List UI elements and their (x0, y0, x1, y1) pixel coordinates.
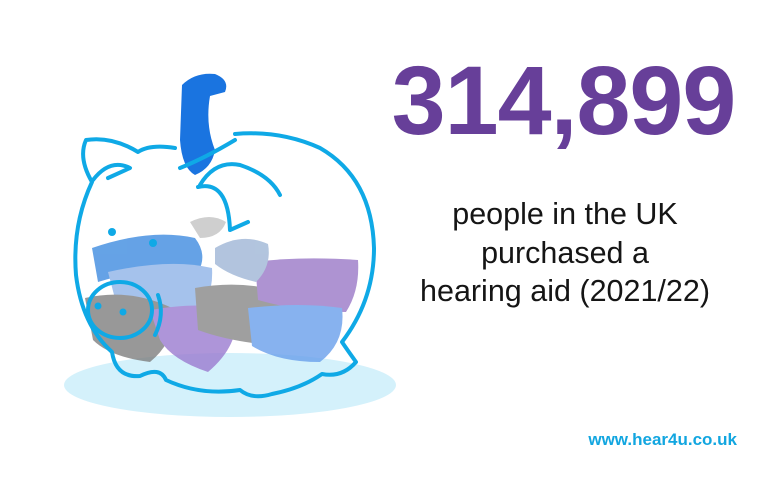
eyes and nostrils (94, 228, 157, 316)
headline number: 314,899 (392, 46, 735, 155)
hearing aid on top (180, 74, 226, 175)
pig outline (75, 133, 374, 396)
shadow ellipse (64, 353, 396, 417)
hearing aids inside (85, 217, 358, 372)
description text (420, 197, 710, 308)
website url: www.hear4u.co.uk (588, 430, 737, 449)
description text: hearing aid (2021/22) (420, 274, 710, 308)
description text: purchased a (481, 236, 649, 270)
description text: people in the UK (452, 197, 678, 231)
illustration: piggy bank with hearing aids (64, 74, 396, 417)
